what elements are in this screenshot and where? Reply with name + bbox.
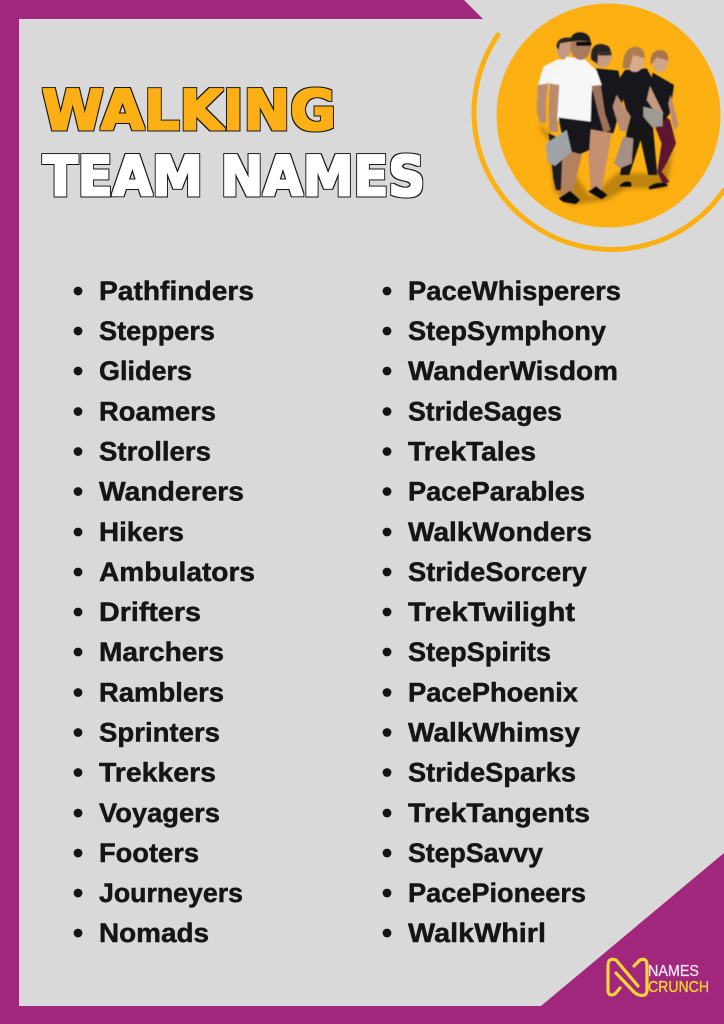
names list column 1: Voyagers: [99, 798, 220, 828]
names list column 1: Trekkers: [99, 758, 216, 788]
logo: Names Crunch: [608, 959, 709, 996]
soft shadow behind group: [537, 123, 677, 205]
logo text: CRUNCH: CRUNCH: [648, 979, 709, 996]
photo circle: [496, 4, 720, 228]
names list column 2: WalkWhirl: [408, 918, 546, 948]
names list column 2: WalkWhimsy: [408, 718, 580, 748]
title: [42, 78, 425, 208]
names list column 2: WalkWonders: [408, 517, 592, 547]
logo icon: yellow N mark: [608, 959, 647, 995]
illustration: group of five people walking: [537, 32, 679, 205]
names list column 1: Drifters: [99, 597, 201, 627]
names list column 2: StepSavvy: [408, 838, 543, 868]
names list column 2: PacePhoenix: [408, 678, 578, 708]
names list column 1: Ambulators: [99, 557, 255, 587]
person 3 middle: [588, 44, 631, 199]
bullet markers column 2: [383, 287, 391, 937]
names list column 2: PacePioneers: [408, 878, 586, 908]
title line: WALKING: WALKING: [42, 78, 336, 142]
names list column 2: PaceParables: [408, 476, 585, 506]
names list column 2: TrekTwilight: [408, 597, 575, 627]
names list column 2: StrideSorcery: [408, 557, 587, 587]
person 1 back left: [537, 37, 571, 190]
title line: TEAM NAMES: TEAM NAMES: [43, 144, 425, 208]
person 4 middle right: [614, 47, 667, 189]
names list column 1: Pathfinders: [99, 276, 254, 306]
names list column 1: Steppers: [99, 316, 215, 346]
names list column 2: PaceWhisperers: [408, 276, 621, 306]
names list column 2: StepSpirits: [408, 637, 551, 667]
names list column 2: StepSymphony: [408, 316, 606, 346]
names list column 2: WanderWisdom: [408, 356, 618, 386]
names list column 1: Footers: [99, 838, 199, 868]
person 5 back right: [647, 50, 679, 185]
names list column 1: Strollers: [99, 436, 211, 466]
names list column 1: Wanderers: [99, 476, 244, 506]
names list column 1: Journeyers: [99, 878, 243, 908]
person 2 front: [546, 32, 611, 204]
names list column 1: Gliders: [99, 356, 192, 386]
names list column 1: Hikers: [99, 517, 184, 547]
names list column 1: Nomads: [99, 918, 209, 948]
names list column 1: Roamers: [99, 396, 216, 426]
bullet markers column 1: [74, 287, 82, 937]
decorative arc around photo: [474, 35, 724, 250]
names list column 2: TrekTales: [408, 436, 536, 466]
names list column 1: [74, 276, 255, 948]
names list column 1: Ramblers: [99, 678, 224, 708]
names list column 1: Sprinters: [99, 718, 220, 748]
logo text: NAMES: NAMES: [648, 963, 699, 980]
names list column 2: TrekTangents: [408, 798, 590, 828]
names list column 2: StrideSparks: [408, 758, 576, 788]
names list column 2: StrideSages: [408, 396, 562, 426]
names list column 1: Marchers: [99, 637, 224, 667]
names list column 2: [383, 276, 621, 948]
